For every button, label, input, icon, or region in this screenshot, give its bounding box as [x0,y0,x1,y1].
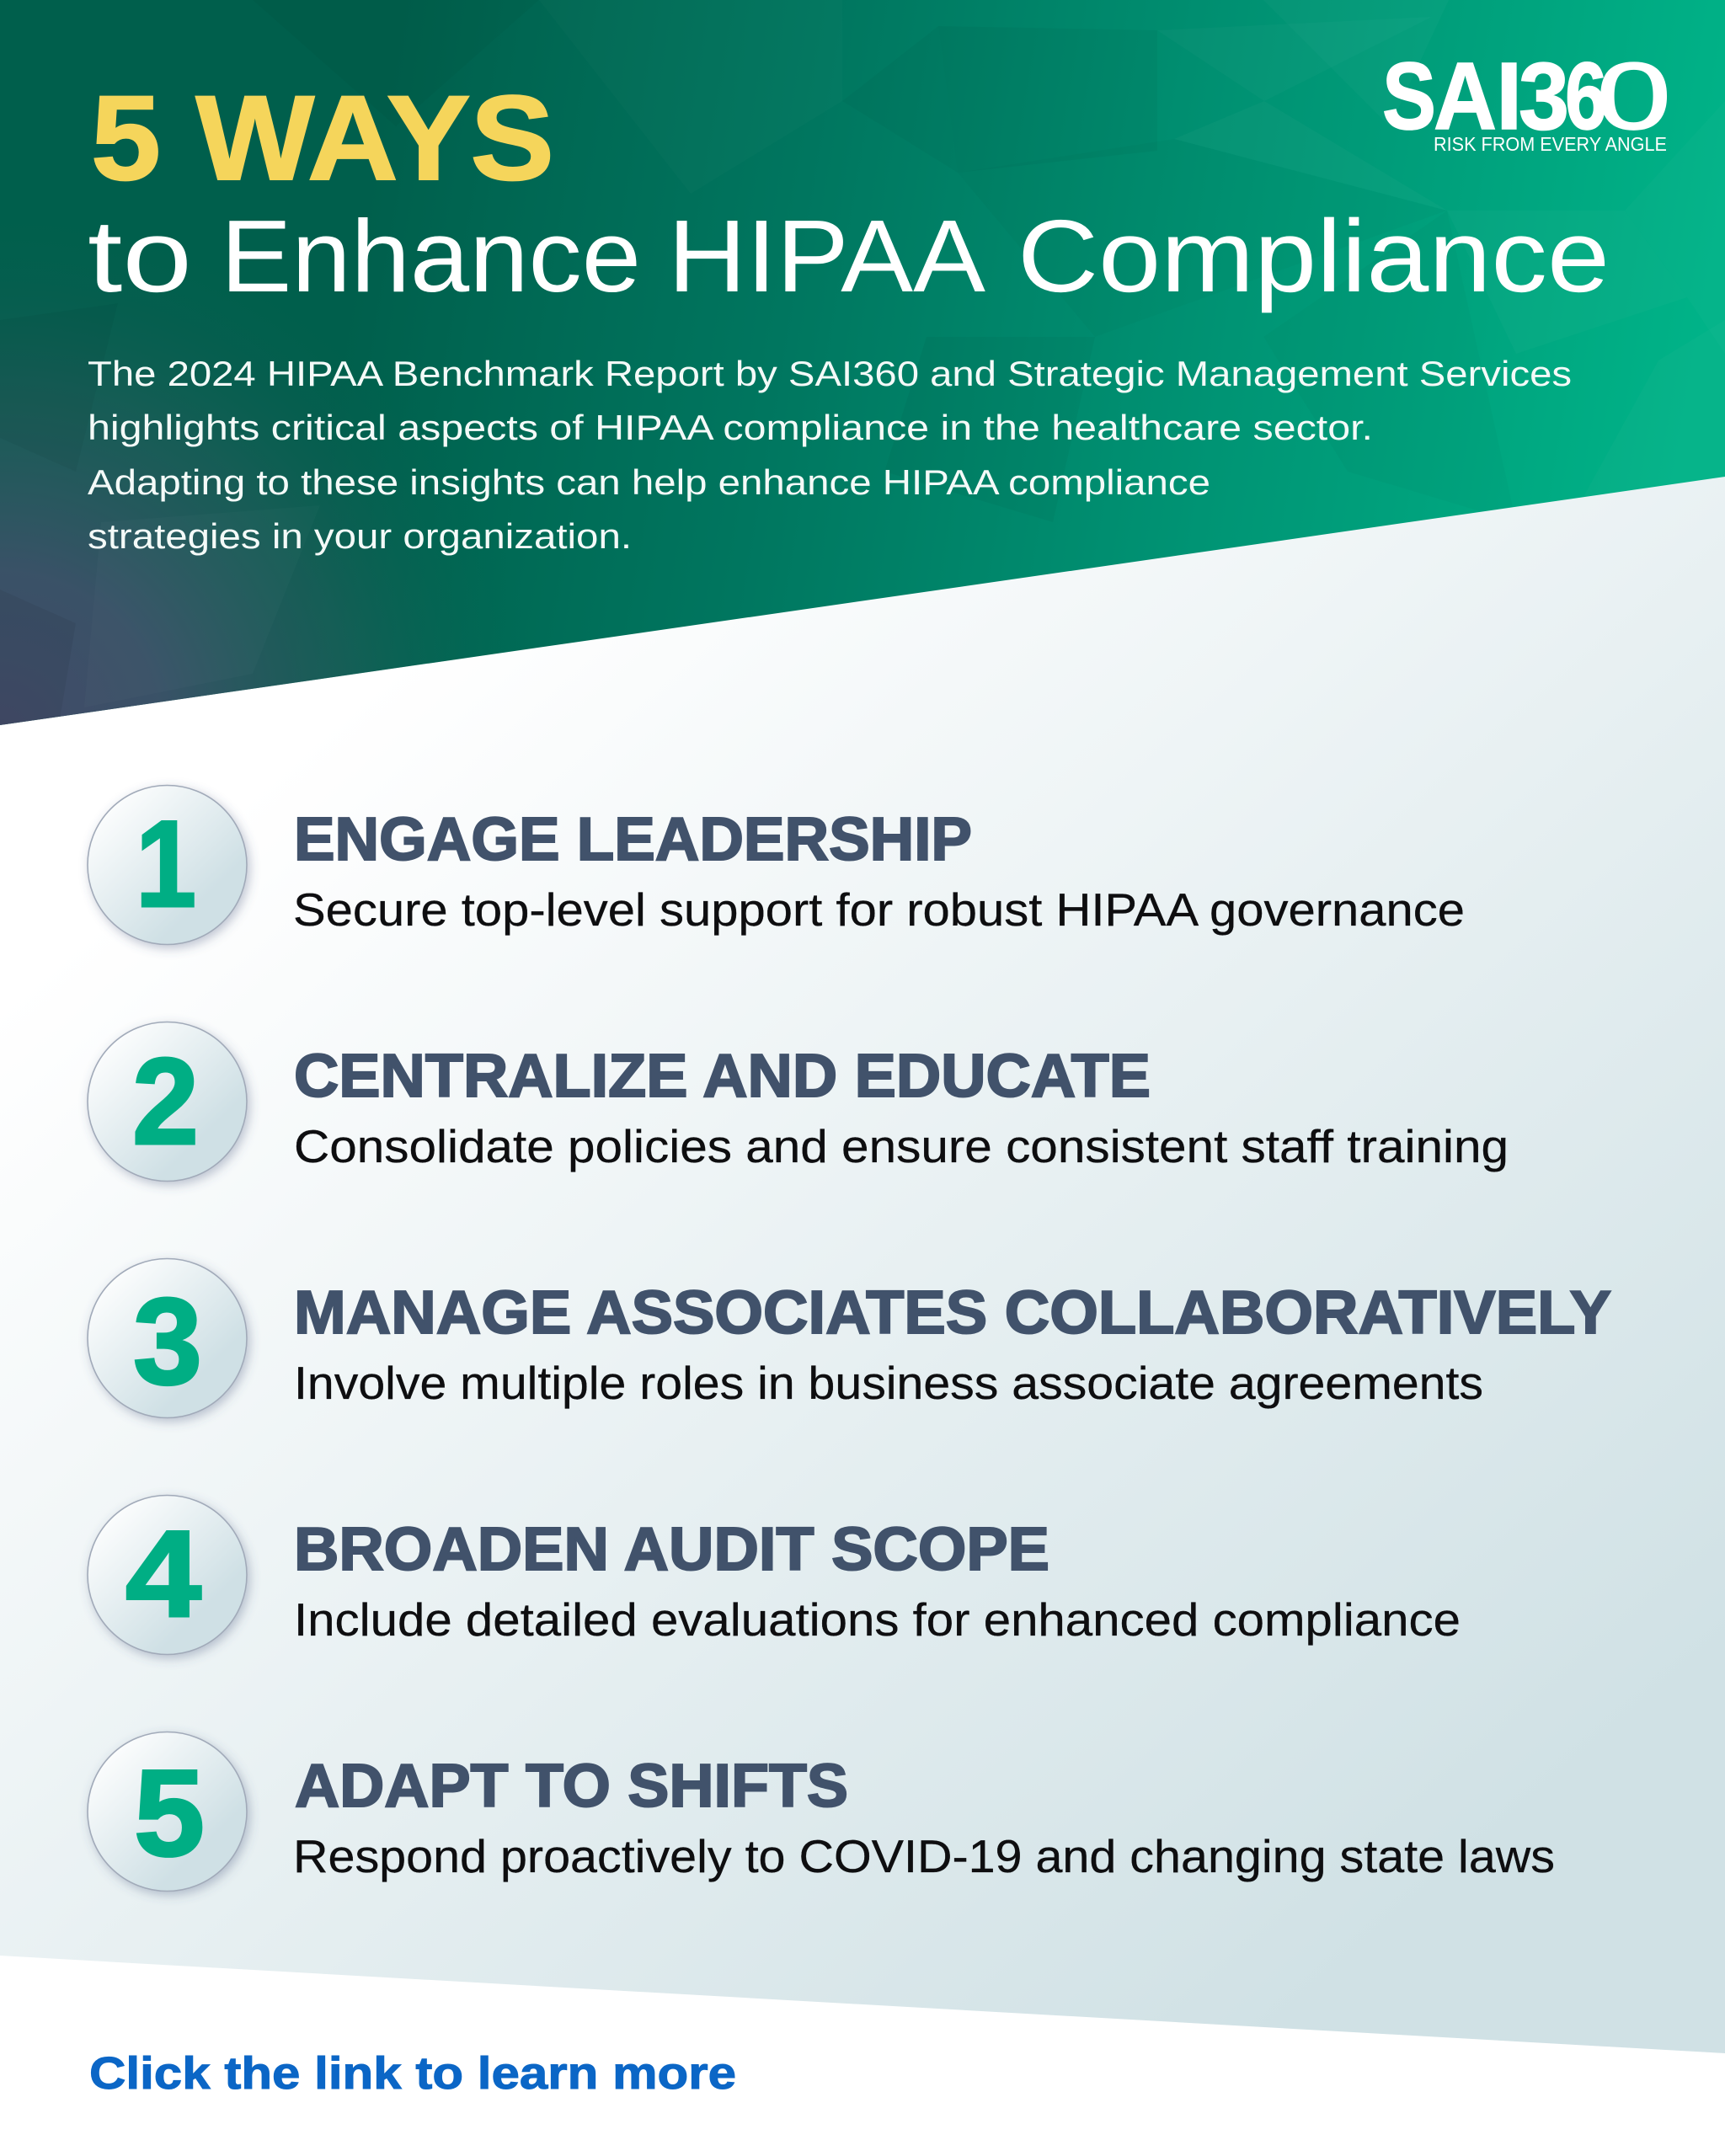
logo: SAI360: 0 [1596,43,1671,149]
number badge 2: 2 [132,1033,199,1170]
intro paragraph: strategies in your organization. [88,516,632,556]
number badge 1 [88,785,247,945]
logo: SAI360: 6 [1565,43,1607,149]
header banner [0,0,1725,733]
number badge 1: 1 [136,795,196,932]
logo: SAI360: RISK FROM EVERY ANGLE [1434,133,1667,155]
title: to Enhance HIPAA Compliance: Compliance [1017,199,1610,313]
description 4: Include detailed evaluations for enhanced compliance [294,1593,1461,1646]
item 3: manage associates collaboratively [88,1258,1611,1418]
number badge 4: 4 [126,1505,201,1642]
item 1: engage leadership [88,785,1465,945]
logo: SAI360: 3 [1519,43,1569,149]
title: to Enhance HIPAA Compliance: HIPAA [668,199,986,313]
number badge 5: 5 [134,1744,205,1881]
description 1: Secure top-level support for robust HIPAA governance [293,883,1465,936]
logo: SAI360 [1382,43,1671,155]
logo: SAI360: I [1496,43,1522,149]
heading 5: ADAPT TO SHIFTS [295,1753,848,1820]
intro paragraph [88,354,1572,556]
intro paragraph: highlights critical aspects of HIPAA compliance in the healthcare sector. [88,408,1373,447]
number badge 3: 3 [133,1273,202,1410]
number badge 3 [88,1258,247,1418]
intro paragraph: The 2024 HIPAA Benchmark Report by SAI360 and Strategic Management Services [88,354,1572,393]
number badge 5 [88,1732,247,1892]
title: to Enhance HIPAA Compliance [88,199,1610,313]
heading 2: CENTRALIZE AND EDUCATE [294,1043,1151,1110]
title: 5 WAYS: 5 WAYS [91,72,554,205]
item 4: broaden audit scope [88,1496,1461,1654]
description 3: Involve multiple roles in business associate agreements [294,1357,1483,1409]
description 5: Respond proactively to COVID-19 and changing state laws [293,1830,1555,1882]
heading 1: ENGAGE LEADERSHIP [294,806,972,873]
logo: SAI360: S [1382,43,1436,149]
item 2: centralize and educate [88,1022,1509,1181]
logo: SAI360: A [1434,43,1497,149]
title: to Enhance HIPAA Compliance: to [88,199,192,313]
title: to Enhance HIPAA Compliance: Enhance [221,199,641,313]
call to action link: Click the link to learn more [89,2048,736,2099]
footer white band [0,1956,1725,2156]
intro paragraph: Adapting to these insights can help enhance HIPAA compliance [88,462,1210,502]
heading 3: MANAGE ASSOCIATES COLLABORATIVELY [294,1279,1611,1347]
item 5: adapt to shifts [88,1732,1555,1892]
description 2: Consolidate policies and ensure consistent staff training [294,1120,1509,1172]
number badge 4 [88,1496,247,1654]
number badge 2 [88,1022,247,1181]
heading 4: BROADEN AUDIT SCOPE [294,1516,1049,1583]
